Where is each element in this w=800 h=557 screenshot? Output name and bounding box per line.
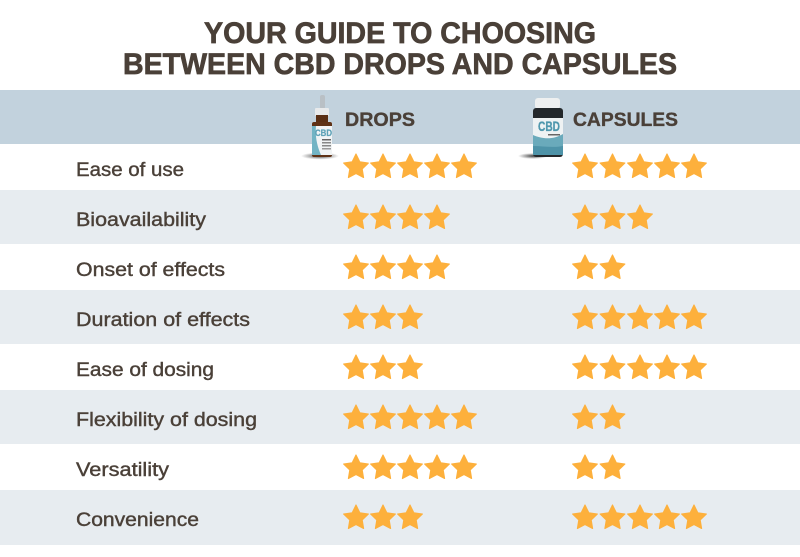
- icon: capsules bottle: [518, 98, 563, 159]
- stars: convenience, drops 3: [344, 505, 422, 528]
- row band: convenience: [0, 490, 800, 545]
- stars: onset, capsules 2: [573, 255, 625, 278]
- stars: versatility, capsules 2: [573, 455, 625, 478]
- icon: capsules bottle: CBD: [538, 119, 560, 134]
- icon: drops bottle: CBD: [315, 128, 332, 139]
- stars: bioavailability, drops 4: [344, 205, 449, 228]
- icon: drops bottle: [301, 95, 339, 160]
- title: [123, 17, 677, 81]
- label: bioavailability: Bioavailability: [76, 210, 206, 231]
- label: versatility: Versatility: [76, 460, 169, 481]
- stars: ease of use, drops 5: [344, 154, 476, 178]
- label: onset of effects: Onset of effects: [76, 260, 225, 281]
- stars: convenience, capsules 5: [573, 505, 706, 528]
- row band: flexibility of dosing: [0, 390, 800, 444]
- title: YOUR GUIDE TO CHOOSING: [204, 17, 596, 50]
- stars: duration, capsules 5: [573, 305, 706, 328]
- row band: bioavailability: [0, 190, 800, 244]
- label: flexibility of dosing: Flexibility of dosing: [76, 410, 257, 431]
- stars: ease of dosing, drops 3: [344, 355, 422, 378]
- label: ease of dosing: Ease of dosing: [76, 360, 214, 381]
- row band: duration of effects: [0, 290, 800, 344]
- heading: drops: DROPS: [345, 109, 415, 131]
- stars: bioavailability, capsules 3: [573, 205, 652, 228]
- label: duration of effects: Duration of effects: [76, 310, 250, 331]
- heading: capsules: CAPSULES: [573, 109, 678, 131]
- stars: duration, drops 3: [344, 305, 422, 328]
- label: convenience: Convenience: [76, 510, 199, 531]
- label: ease of use: Ease of use: [76, 160, 184, 181]
- title: BETWEEN CBD DROPS AND CAPSULES: [123, 48, 677, 81]
- stars: onset, drops 4: [344, 255, 449, 278]
- stars: flexibility, drops 5: [344, 405, 476, 428]
- stars: versatility, drops 5: [344, 455, 476, 478]
- header band: [0, 90, 800, 144]
- stars: flexibility, capsules 2: [573, 405, 625, 428]
- stars: ease of dosing, capsules 5: [573, 355, 706, 378]
- stars: ease of use, capsules 5: [573, 154, 706, 178]
